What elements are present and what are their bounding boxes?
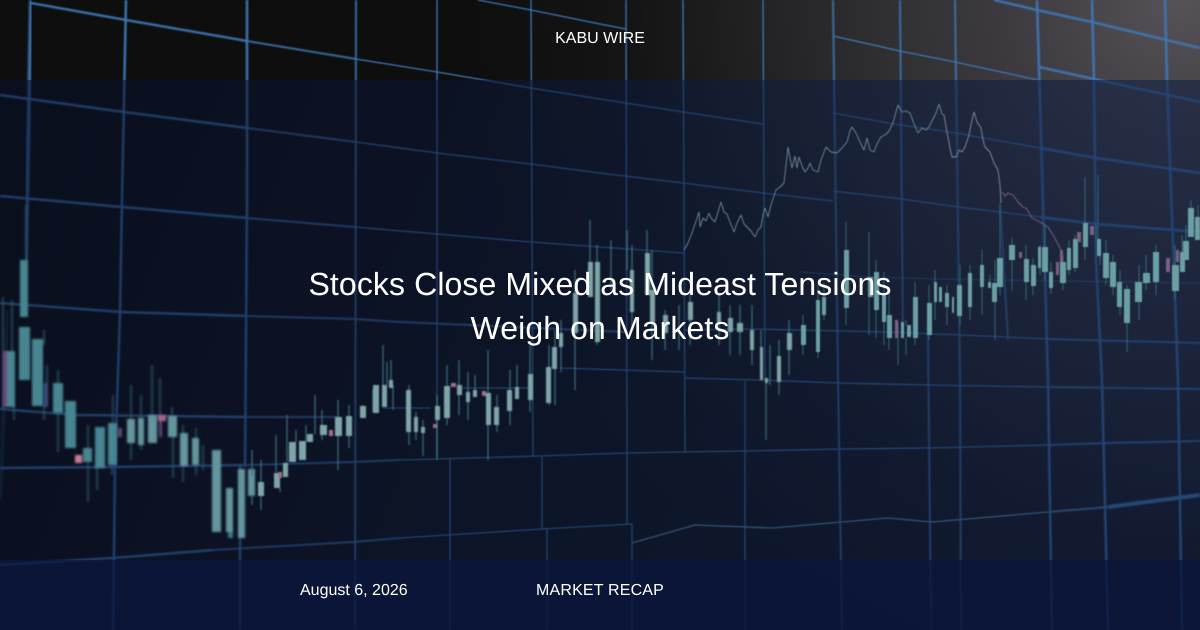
headline: Stocks Close Mixed as Mideast Tensions <box>308 266 892 302</box>
candlesticks: right <box>801 175 1200 365</box>
date: August 6, 2026 <box>300 582 408 599</box>
site name: KABU WIRE <box>555 30 645 47</box>
candlesticks: left, out of focus <box>3 205 255 538</box>
candlesticks: centre <box>252 220 792 510</box>
footer band overlay <box>0 560 1200 630</box>
middle band overlay <box>0 80 1200 560</box>
category: MARKET RECAP <box>536 582 664 599</box>
line chart: rising section <box>684 104 1061 250</box>
headline <box>308 266 892 346</box>
headline: Weigh on Markets <box>471 310 729 346</box>
